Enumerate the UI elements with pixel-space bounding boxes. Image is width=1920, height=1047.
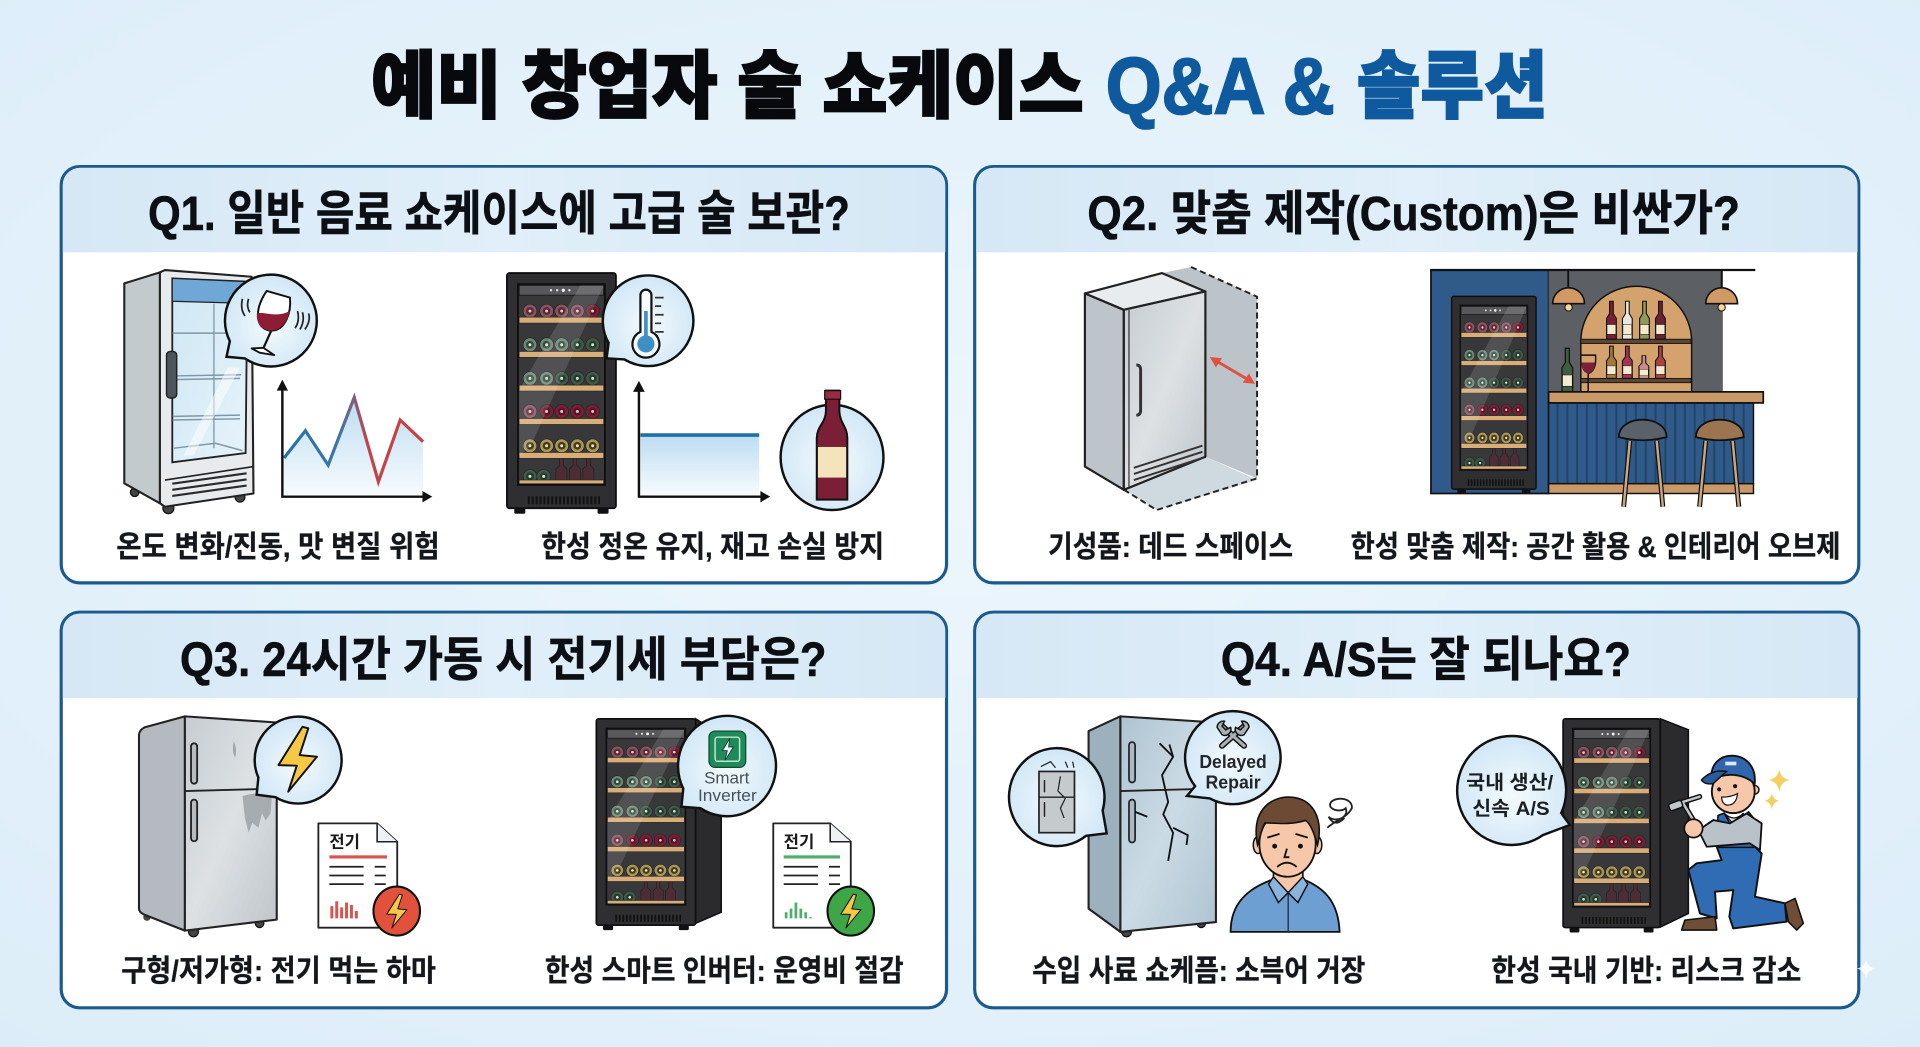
caption: custom solution: 한성 맞춤 제작: 공간 활용 & 인테리어 오브제 [1351,531,1840,564]
bubble: Smart Inverter: Inverter [698,786,757,805]
heading: Q1: Q1. 일반 음료 쇼케이스에 고급 술 보관? [148,188,850,241]
panel: Q2 custom manufacture [975,167,1859,583]
watermark sparkle [1856,959,1876,978]
icon: Hansung wine cabinet [507,273,616,514]
icon: worried customer [1231,797,1340,932]
bubble: Smart Inverter [678,716,776,816]
caption: dead space: 기성품: 데드 스페이스 [1048,531,1293,564]
icon: Hansung wine cabinet with inverter [596,719,721,930]
title: 솔루션 [1357,44,1548,127]
bubble: lightning [255,717,342,804]
bubble: shaking wine glass [225,275,317,366]
title: Q&A & [1106,41,1335,130]
chart: fluctuating temperature [277,380,432,502]
icon: wine bottle in circle [781,391,883,510]
panel: Q3 electricity cost [61,612,947,1008]
icon: broken imported fridge [1089,716,1216,937]
caption: old type: 구형/저가형: 전기 먹는 하마 [121,955,436,988]
icon: stress scribble [1327,799,1352,828]
bubble: Delayed Repair: Repair [1206,772,1261,793]
bubble: domestic production: 국내 생산/ [1466,772,1554,794]
heading: Q4: Q4. A/S는 잘 되나요? [1221,634,1631,687]
caption: risk: 온도 변화/진동, 맛 변질 위험 [116,531,440,564]
caption: inverter: 한성 스마트 인버터: 운영비 절감 [545,955,904,988]
panel: Q1 general beverage showcase [61,167,947,583]
bubble: domestic production: 신속 A/S [1472,798,1550,820]
icon: low electricity bill: 전기 [784,832,814,851]
icon: high electricity bill [318,823,420,936]
title [371,41,1548,130]
icon: repair technician [1668,756,1803,930]
title: 예비 창업자 술 쇼케이스 [371,44,1084,127]
panel: Q4 after-sales service [975,612,1859,1008]
icon: high electricity bill: 전기 [329,832,360,851]
icon: sparkles [1764,769,1790,809]
heading: Q3: Q3. 24시간 가동 시 전기세 부담은? [180,634,827,687]
icon: low electricity bill [773,823,874,936]
bubble: Delayed Repair: Delayed [1199,751,1267,772]
heading: Q2: Q2. 맞춤 제작(Custom)은 비싼가? [1087,188,1740,241]
heading: Q1 [63,168,945,252]
icon: Hansung cabinet [1563,719,1688,932]
bubble: broken fridge closeup [1009,748,1107,846]
heading: Q2 [976,168,1858,252]
bubble: Delayed Repair [1185,711,1281,804]
icon: old fridge [139,716,277,937]
bubble: Smart Inverter: Smart [704,769,750,788]
icon: off-the-shelf fridge with dead space [1085,267,1257,510]
heading: Q4 [976,614,1858,698]
caption: solution: 한성 정온 유지, 재고 손실 방지 [541,531,884,564]
icon: glass door beverage fridge [124,270,253,514]
caption: domestic base: 한성 국내 기반: 리스크 감소 [1491,955,1801,988]
heading: Q3 [63,614,945,698]
chart: constant temperature [633,381,770,502]
bubble: domestic production [1457,736,1570,845]
caption: imported risk: 수입 사료 쇼케픔: 소븍어 거장 [1032,955,1365,988]
bubble: thermometer [603,275,693,366]
illustration: custom bar interior [1430,270,1763,507]
